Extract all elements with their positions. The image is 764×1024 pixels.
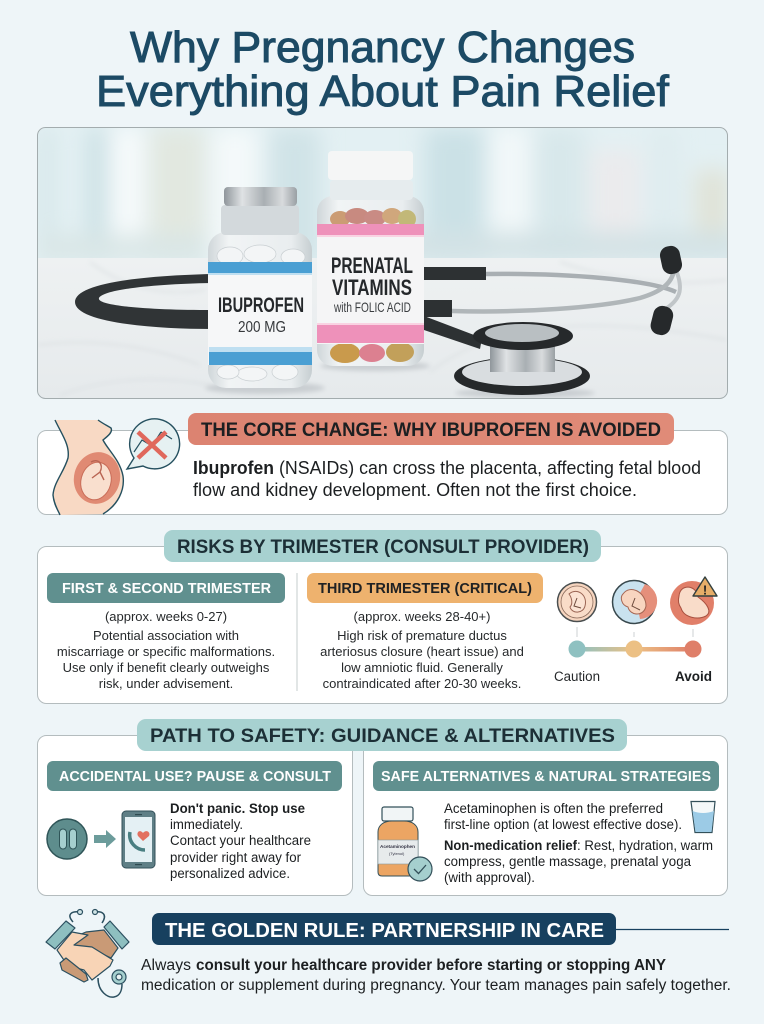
icon: acetaminophen bottle: Acetaminophen [380,844,415,849]
soft shadows [205,361,595,398]
marble table [38,258,727,399]
photo: medicine bottles and stethoscope: PRENATAL [331,253,413,278]
arrow [94,830,116,848]
golden rule text: Always [141,957,191,974]
body text: Ibuprofen [193,458,274,478]
alternatives text: Acetaminophen is often the preferred [444,801,663,816]
third trimester column: (approx. weeks 28-40+) [354,609,490,624]
alternatives text: first-line option (at lowest effective dose). [444,817,682,832]
first and second trimester column: miscarriage or specific malformations. [57,644,275,659]
panel: the core change [38,413,728,515]
icon: crossed out molecule bubble [127,419,180,469]
photo: medicine bottles and stethoscope: VITAMINS [332,275,412,300]
icon: pregnant belly with fetus [53,420,126,515]
body text [193,458,701,500]
section heading [137,719,627,751]
icon: pause button [47,819,87,859]
alternatives text: (with approval). [444,870,535,885]
photo: medicine bottles and stethoscope: with FOLIC ACID [333,299,411,315]
prenatal bottle [317,196,424,366]
first and second trimester column: FIRST & SECOND TRIMESTER [62,581,272,597]
timeline: caution to avoid: Caution [554,669,600,684]
photo: medicine bottles and stethoscope [38,128,740,399]
title: Why Pregnancy Changes [130,23,635,72]
ibuprofen bottle [208,232,312,388]
section: the golden rule [46,910,731,997]
third trimester column: THIRD TRIMESTER (CRITICAL) [318,581,532,597]
third trimester column: High risk of premature ductus [337,628,507,643]
icon: fetus stage 1 [558,582,596,622]
section heading [164,530,601,562]
third trimester column: low amniotic fluid. Generally [341,660,503,675]
icon: glass of water [691,802,715,832]
stethoscope tubing [75,274,212,329]
heading pill: THE GOLDEN RULE: PARTNERSHIP IN CARE [165,920,604,942]
golden rule text: consult your healthcare provider before starting or stopping ANY [196,957,667,974]
instructions text: immediately. [170,817,243,832]
body text: (NSAIDs) can cross the placenta, affecting fetal blood [279,458,701,478]
pill heading: THE CORE CHANGE: WHY IBUPROFEN IS AVOIDED [201,420,661,441]
panel: risks by trimester [38,530,728,704]
left card: accidental use: ACCIDENTAL USE? PAUSE & CONSULT [59,769,331,785]
photo: medicine bottles and stethoscope: 200 MG [238,319,286,336]
pill heading [188,413,674,445]
right card: safe alternatives [364,736,728,896]
left card: accidental use [38,736,352,896]
chest piece [454,357,590,395]
icon: handshake with stethoscope [46,910,129,997]
panel: path to safety [38,719,728,896]
section heading: PATH TO SAFETY: GUIDANCE & ALTERNATIVES [150,726,615,747]
title: Everything About Pain Relief [96,67,670,116]
alternatives text: : Rest, hydration, warm [577,838,713,853]
icon: phone with heart [122,811,155,868]
instructions text [170,801,311,881]
photo: medicine bottles and stethoscope: IBUPROFEN [218,294,304,317]
icon: acetaminophen bottle [378,807,432,881]
third trimester column: contraindicated after 20-30 weeks. [323,676,521,691]
first and second trimester column: Potential association with [93,628,239,643]
first and second trimester column [47,573,285,691]
heading pill [152,913,729,945]
alternatives text [444,801,713,885]
right card: safe alternatives: SAFE ALTERNATIVES & NATURAL STRATEGIES [381,769,711,785]
golden rule text [141,957,731,994]
instructions text: personalized advice. [170,866,290,881]
alternatives text: compress, gentle massage, prenatal yoga [444,854,691,869]
timeline: caution to avoid [554,627,712,684]
icon: fetus stage 3 with warning [670,577,717,625]
timeline: caution to avoid: Avoid [675,669,712,684]
instructions text: provider right away for [170,850,301,865]
alternatives text: Non-medication relief [444,838,577,853]
icon: acetaminophen bottle: (Tylenol) [389,851,405,856]
first and second trimester column: risk, under advisement. [99,676,233,691]
golden rule text: medication or supplement during pregnancy. Your team manages pain safely together. [141,977,731,994]
title [96,23,670,116]
body text: flow and kidney development. Often not the first choice. [193,480,637,500]
section heading: RISKS BY TRIMESTER (CONSULT PROVIDER) [177,537,589,558]
third trimester column [307,573,543,691]
icon: fetus stage 3 with warning: ! [703,582,707,598]
ear tips [660,246,682,274]
instructions text: Don't panic. Stop use [170,801,305,816]
first and second trimester column: (approx. weeks 0-27) [105,609,227,624]
third trimester column: arteriosus closure (heart issue) and [320,644,524,659]
first and second trimester column: Use only if benefit clearly outweighs [63,660,270,675]
instructions text: Contact your healthcare [170,833,311,848]
icon: fetus stage 2 [612,580,657,624]
